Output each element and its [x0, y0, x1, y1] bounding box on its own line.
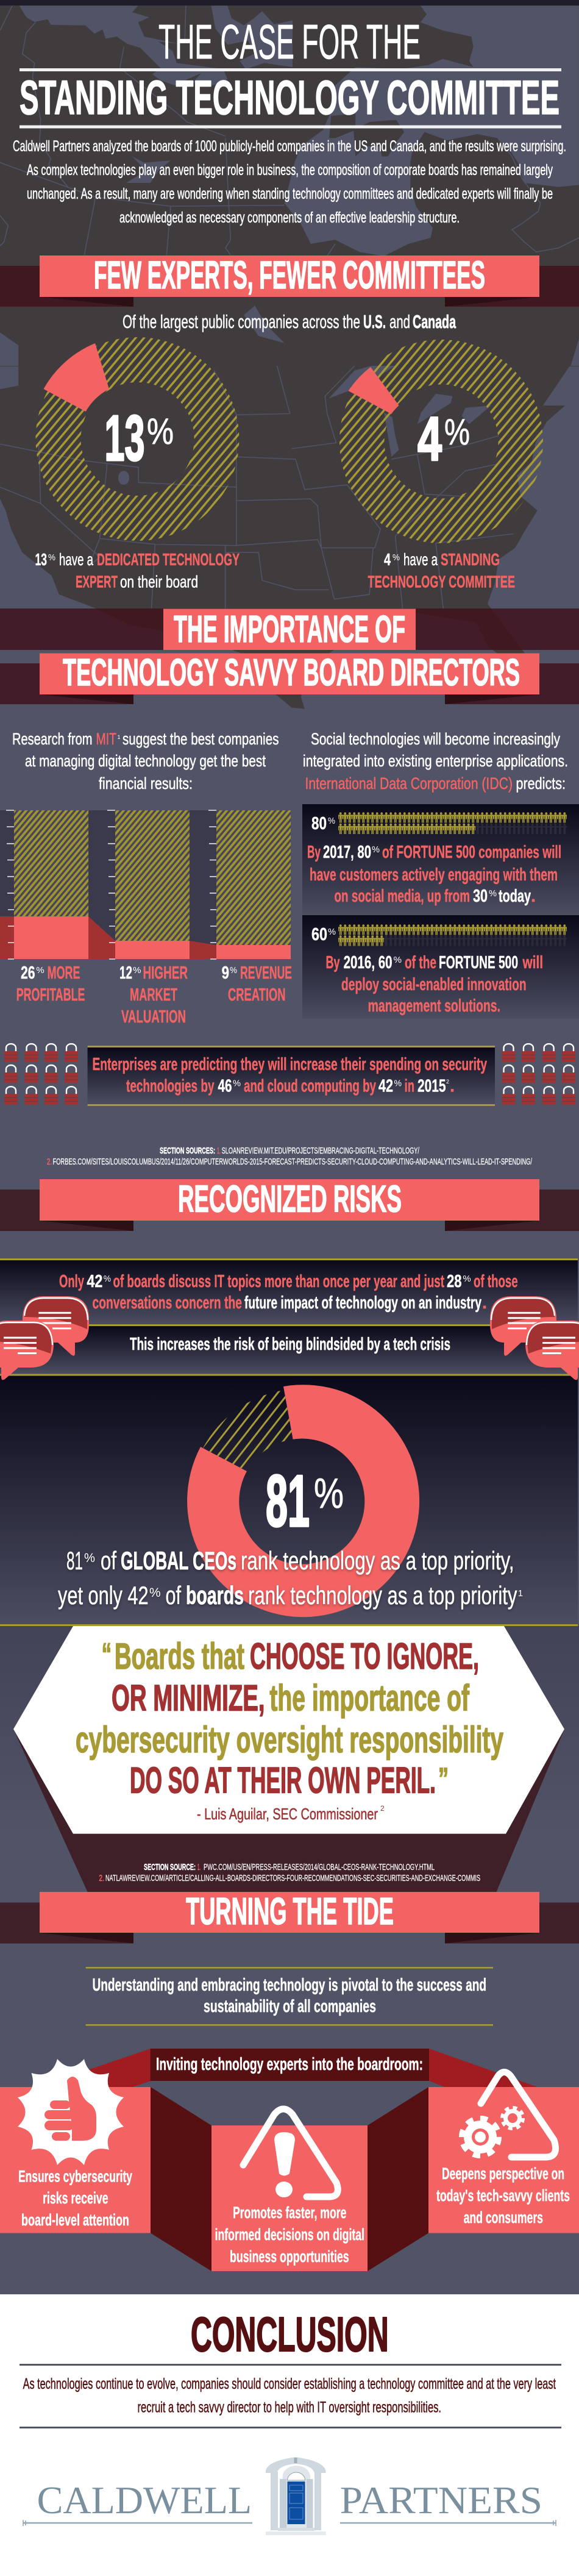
bar label: 26% more profitable: PROFITABLE	[16, 985, 85, 1005]
intro paragraph	[13, 138, 566, 226]
text: CEO vs boards: GLOBAL CEOs	[121, 1546, 236, 1575]
panel: faster decisions: Promotes faster, more	[233, 2203, 346, 2222]
panel: 80% prediction: .	[531, 887, 536, 906]
banner: turning the tide	[0, 1891, 579, 1944]
callout: enterprise spending: .	[450, 1077, 455, 1096]
panel: 60% prediction: will	[522, 953, 543, 972]
text: MIT research: suggest the best companies	[123, 730, 279, 748]
title	[20, 15, 561, 128]
panel: board discussion stats: Only	[59, 1272, 84, 1291]
bar label: 9% revenue creation: %	[230, 965, 237, 976]
bar label: 12% higher market valuation	[119, 963, 188, 1027]
callout: enterprise spending	[88, 1046, 495, 1106]
panel: hexagon quote: OR MINIMIZE,	[112, 1678, 265, 1719]
text: CEO vs boards	[58, 1546, 523, 1610]
callout: enterprise spending: in	[405, 1077, 414, 1096]
banner: importance of technology savvy board directors	[0, 608, 579, 704]
section sources 1	[47, 1146, 533, 1167]
text: CEO vs boards: of	[166, 1581, 181, 1610]
text: conclusion	[20, 2364, 561, 2428]
panel: 80% prediction: 80	[311, 814, 327, 833]
callout: enterprise spending: 42	[378, 1077, 393, 1096]
panel: faster decisions: informed decisions on digital	[215, 2225, 364, 2244]
chart: 81% donut: %	[314, 1469, 344, 1517]
banner: few experts, fewer committees	[0, 253, 579, 307]
icon: chat bubbles right	[490, 1296, 579, 1380]
text: CEO vs boards: of	[101, 1546, 116, 1575]
banner: recognized risks: RECOGNIZED RISKS	[178, 1178, 402, 1221]
text: CEO vs boards: 81	[66, 1546, 83, 1575]
text: understanding technology: sustainability of all companies	[204, 1997, 376, 2016]
panel: faster decisions	[211, 2109, 368, 2271]
subheading: Of the largest public companies across the	[123, 311, 360, 332]
section sources 2: SECTION SOURCE:	[144, 1862, 196, 1872]
panel: cybersecurity attention	[0, 2059, 151, 2233]
panel: conclusion background	[0, 2294, 579, 2576]
panel: board discussion stats: %	[104, 1274, 111, 1284]
bar label: 26% more profitable: 26	[21, 963, 35, 983]
text: MIT research: at managing digital technology get the best	[25, 752, 266, 770]
panel: cybersecurity attention: risks receive	[43, 2189, 108, 2207]
panel: 60% prediction: By	[325, 953, 340, 972]
callout: enterprise spending: technologies by	[126, 1077, 215, 1096]
caption: 13% dedicated expert: on their board	[120, 572, 198, 591]
text: CEO vs boards: %	[84, 1551, 95, 1565]
caption: 13% dedicated expert: %	[48, 552, 55, 563]
logo: Caldwell Partners	[23, 2457, 556, 2535]
section sources 2: 2.	[99, 1873, 104, 1883]
section sources 1: SLOANREVIEW.MIT.EDU/PROJECTS/EMBRACING-DIGITAL-TECHNOLOGY/	[222, 1146, 420, 1156]
logo: Caldwell Partners: CALDWELL	[37, 2478, 252, 2522]
text: CEO vs boards: %	[149, 1586, 161, 1600]
section sources 1: 1.	[217, 1146, 221, 1156]
caption: 13% dedicated expert: EXPERT	[76, 572, 118, 591]
banner: recognized risks	[0, 1178, 579, 1231]
chart: 13% donut: 13	[105, 402, 145, 474]
panel: 80% prediction: %	[328, 816, 335, 826]
panel: 80% prediction: 30	[473, 887, 488, 906]
chart: 4% donut: %	[444, 412, 470, 452]
panel: board discussion stats: .	[482, 1293, 487, 1313]
panel: hexagon quote: Boards that	[115, 1636, 244, 1677]
panel: board discussion stats: %	[463, 1274, 471, 1284]
panel: faster decisions: business opportunities	[230, 2247, 349, 2266]
caption: 4% standing committee: STANDING	[441, 550, 500, 569]
section sources 2	[99, 1862, 480, 1883]
chart: 4% donut: 4	[417, 404, 442, 474]
callout: enterprise spending: and cloud computing by	[244, 1077, 376, 1096]
ribbon wings	[61, 2049, 538, 2087]
heading: inviting technology experts	[151, 2049, 429, 2081]
caption: 13% dedicated expert	[35, 550, 240, 591]
caption: 13% dedicated expert: have a	[59, 550, 93, 569]
panel: 60% prediction: %	[328, 927, 336, 937]
bar label: 9% revenue creation: REVENUE	[240, 963, 292, 983]
icon: warning triangle	[243, 2109, 338, 2197]
panel: cybersecurity attention: Ensures cybersecurity	[18, 2167, 132, 2186]
section sources 1: SECTION SOURCES:	[160, 1146, 215, 1156]
top band	[0, 0, 579, 5]
section sources 1: 2.	[47, 1157, 52, 1167]
icons: padlocks right	[502, 1044, 575, 1105]
bar label: 26% more profitable: MORE	[48, 963, 80, 983]
panel: cybersecurity attention: board-level attention	[21, 2211, 129, 2229]
caption: 13% dedicated expert: DEDICATED TECHNOLOGY	[97, 550, 240, 569]
caption: 13% dedicated expert: 13	[35, 550, 47, 569]
panel: board discussion stats	[0, 1258, 578, 1324]
text: MIT research	[12, 730, 279, 793]
panel: 60% prediction: 2016, 60	[344, 953, 393, 972]
heading: inviting technology experts: Inviting technology experts into the boardroom:	[156, 2055, 423, 2074]
icon: chat bubbles left	[0, 1296, 89, 1380]
icon: gears in triangle	[462, 2072, 556, 2157]
caption: 4% standing committee: have a	[403, 550, 438, 569]
panel: hexagon quote	[13, 1626, 564, 1892]
panel: hexagon quote: ”	[438, 1761, 449, 1796]
chart: 81% donut	[187, 1385, 419, 1617]
panel: board discussion stats: conversations concern the	[93, 1293, 242, 1313]
panel folds	[151, 2087, 428, 2271]
panel: board discussion stats: 42	[87, 1272, 102, 1291]
panel: 60% prediction: %	[394, 955, 402, 965]
text: social technologies	[303, 730, 568, 793]
callout: enterprise spending: %	[233, 1078, 241, 1089]
callout: enterprise spending: 2	[446, 1079, 449, 1085]
caption: 4% standing committee: %	[393, 552, 400, 563]
callout: enterprise spending: 2015	[417, 1077, 446, 1096]
text: understanding technology	[86, 1967, 493, 2026]
panel: 80% prediction: today	[499, 887, 531, 906]
text: CEO vs boards: 1	[518, 1588, 523, 1599]
bar label: 12% higher market valuation: MARKET	[130, 985, 177, 1005]
panel: deepens perspective	[428, 2072, 579, 2233]
bar label: 26% more profitable	[16, 963, 85, 1005]
bar label: 12% higher market valuation: HIGHER	[143, 963, 188, 983]
text: social technologies: International Data Corporation (IDC)	[305, 774, 513, 793]
logo: Caldwell Partners: PARTNERS	[340, 2478, 542, 2522]
bar label: 9% revenue creation	[222, 963, 292, 1005]
bar label: 26% more profitable: %	[36, 965, 44, 976]
icon: thumbs up badge	[18, 2059, 124, 2165]
text: MIT research: financial results:	[99, 774, 193, 793]
icons: padlocks left	[4, 1044, 78, 1105]
icon: blue door	[266, 2457, 325, 2535]
caption: 4% standing committee: 4	[384, 550, 391, 569]
chart: 13% donut: %	[147, 411, 174, 452]
bar chart: financial results	[0, 810, 291, 959]
panel: 60% prediction: of the	[405, 953, 436, 972]
panel: hexagon quote: the importance of	[269, 1678, 470, 1719]
text: MIT research: MIT	[96, 730, 116, 748]
panel: hexagon quote: - Luis Aguilar, SEC Commissioner	[197, 1805, 378, 1823]
panel: 60% prediction: FORTUNE 500	[439, 953, 518, 972]
subheading: Canada	[413, 311, 456, 332]
panel: 80% prediction: %	[489, 888, 497, 899]
panel: 80% prediction: By	[307, 843, 321, 862]
section sources 2: PWC.COM/US/EN/PRESS-RELEASES/2014/GLOBAL-CEOS-RANK-TECHNOLOGY.HTML	[204, 1862, 435, 1872]
panel: 80% prediction: %	[372, 844, 380, 855]
panel: 60% prediction	[302, 915, 579, 1019]
subheading: U.S.	[363, 311, 386, 332]
text: CEO vs boards: boards	[186, 1581, 244, 1610]
chart: 4% donut	[339, 340, 543, 543]
panel: 80% prediction	[302, 804, 579, 915]
banner: turning the tide: TURNING THE TIDE	[186, 1891, 394, 1933]
bar label: 12% higher market valuation: %	[133, 965, 141, 976]
panel: hexagon quote: “	[102, 1637, 112, 1671]
bar label: 9% revenue creation: CREATION	[228, 985, 285, 1005]
panel: 60% prediction: management solutions.	[368, 996, 500, 1016]
panel: 80% prediction: 2017, 80	[323, 843, 371, 862]
panel: CEO priority	[0, 1374, 578, 1626]
callout: enterprise spending: %	[394, 1078, 402, 1089]
panel: board discussion stats: 28	[447, 1272, 462, 1291]
text: social technologies: predicts:	[516, 774, 566, 793]
bar label: 9% revenue creation: 9	[222, 963, 229, 983]
bar label: 12% higher market valuation: 12	[119, 963, 132, 983]
background gradient behind quote	[0, 1626, 579, 1831]
section sources 2: 1.	[197, 1862, 201, 1872]
subheading: and	[389, 311, 410, 332]
panel: 60% prediction: 60	[311, 925, 327, 944]
panel: board discussion stats: of those	[474, 1272, 518, 1291]
bar label: 12% higher market valuation: VALUATION	[121, 1007, 186, 1027]
banner: importance of technology savvy board directors: THE IMPORTANCE OF	[174, 608, 405, 651]
callout: enterprise spending: 46	[218, 1077, 232, 1096]
text: MIT research: 1	[117, 734, 121, 740]
chart: 13% donut	[35, 337, 239, 541]
panel: hexagon quote: 2	[380, 1804, 385, 1813]
text: MIT research: Research from	[12, 730, 93, 748]
map of North America	[0, 0, 579, 709]
text: CEO vs boards: yet only 42	[58, 1581, 149, 1610]
heading: conclusion: CONCLUSION	[191, 2307, 389, 2361]
panel: 80% prediction: on social media, up from	[334, 887, 470, 906]
chart: 81% donut: 81	[266, 1460, 310, 1542]
panel: risk statement	[0, 1324, 578, 1374]
caption: 4% standing committee	[368, 550, 515, 591]
